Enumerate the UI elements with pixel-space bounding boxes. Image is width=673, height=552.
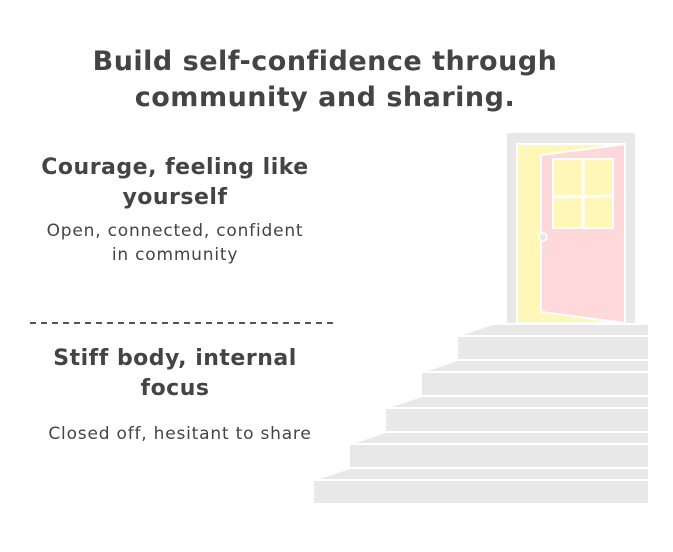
heading: negative: Stiff body, internal	[53, 346, 297, 371]
heading: negative	[53, 346, 297, 401]
heading: positive: yourself	[122, 185, 228, 210]
text: positive description	[47, 221, 303, 265]
heading: positive	[41, 155, 309, 210]
text: negative description: Closed off, hesitant to share	[48, 424, 312, 444]
divider	[30, 322, 333, 324]
icon: door	[507, 133, 635, 323]
heading: positive: Courage, feeling like	[41, 155, 309, 180]
icon: stairs	[314, 325, 648, 503]
text: positive description: in community	[112, 245, 238, 265]
title: Build self-confidence through	[93, 46, 557, 77]
text: positive description: Open, connected, confident	[47, 221, 303, 241]
title: community and sharing.	[135, 82, 515, 113]
title	[93, 46, 557, 113]
heading: negative: focus	[140, 376, 209, 401]
